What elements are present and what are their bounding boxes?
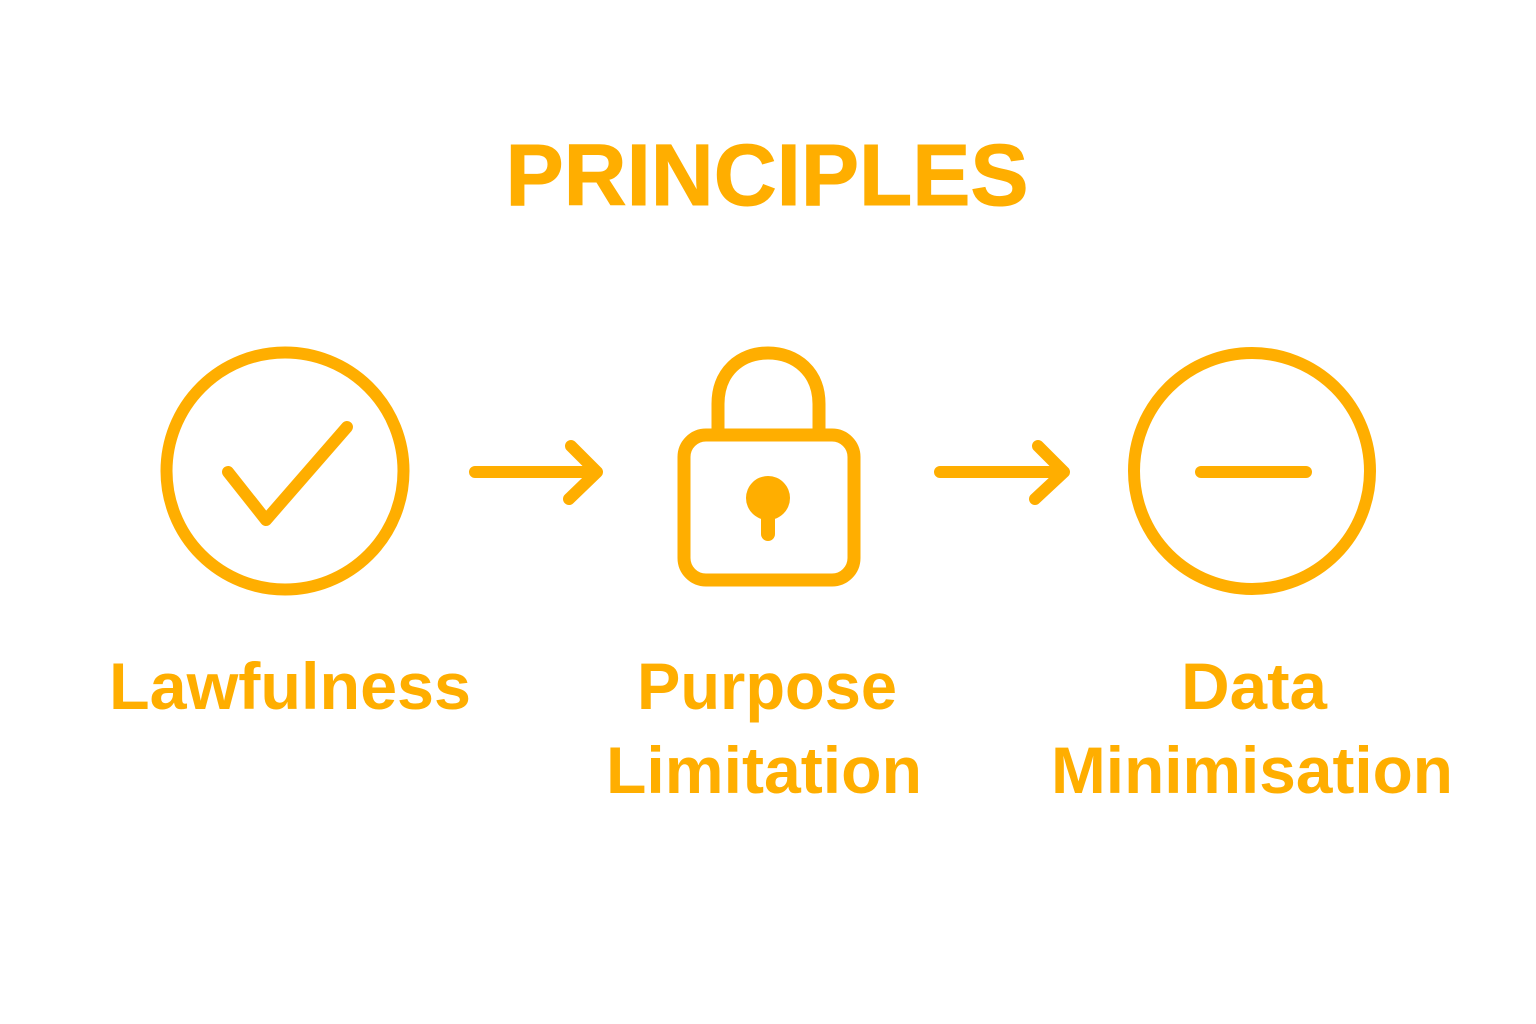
label: Data Minimisation: Data — [1181, 649, 1328, 723]
arrow: lawfulness to purpose limitation — [475, 446, 597, 499]
icon: check circle — [166, 352, 404, 590]
label: Purpose Limitation — [606, 649, 922, 807]
label: Lawfulness: Lawfulness — [109, 649, 471, 723]
icon: padlock — [684, 353, 854, 580]
label: Data Minimisation — [1051, 649, 1453, 807]
label: Purpose Limitation: Purpose — [637, 649, 897, 723]
label: Purpose Limitation: Limitation — [606, 733, 922, 807]
icon: minus circle — [1134, 353, 1370, 589]
label: Data Minimisation: Minimisation — [1051, 733, 1453, 807]
arrow: purpose limitation to data minimisation — [940, 446, 1064, 499]
title: PRINCIPLES — [506, 127, 1028, 224]
